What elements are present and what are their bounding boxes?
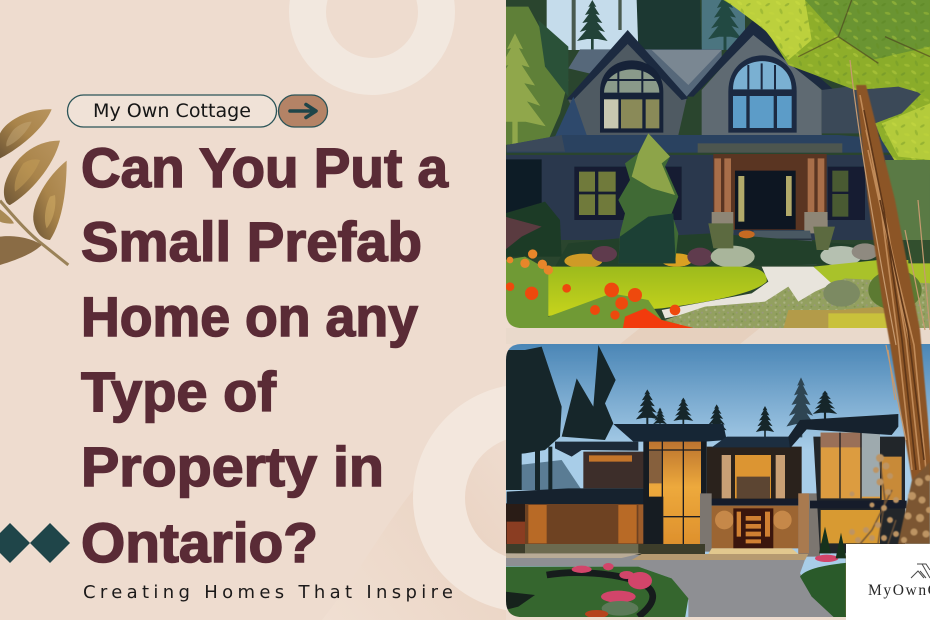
title [81,136,449,574]
title: Type of [81,360,276,423]
icon: golden leaf branch [0,109,68,265]
left lower window [574,167,682,220]
right gable [687,21,832,135]
central tall window [643,437,707,548]
tagline: Creating Homes That Inspire [83,582,453,603]
entrance [708,506,802,548]
foliage top right [723,0,930,263]
lower roof [507,135,930,153]
lawn [548,260,930,316]
decorative ring top [308,0,436,76]
shrubs [505,202,882,268]
roof [568,49,722,97]
logo box [846,544,930,620]
path [662,267,833,318]
lower wall [505,155,930,240]
modern house body [505,414,907,557]
garden beds [505,527,848,618]
driveway [505,553,835,618]
central spruce [618,133,678,263]
title: Home on any [81,285,418,348]
steps [753,231,817,265]
right wing [813,436,905,554]
pill: My Own Cottage [68,95,276,127]
title: Can You Put a [81,136,449,199]
dried flowers [846,454,930,617]
mid section [707,447,802,500]
left gable [567,30,688,135]
left arch window [600,60,663,133]
decorative swoosh and ring bottom [322,328,930,620]
pill: My Own Cottage: My Own Cottage [93,101,251,122]
title: Property in [81,435,384,498]
icon: teal diamonds [0,523,70,563]
forest trees [505,345,837,490]
icon: arrow pill [278,95,328,127]
photo: craftsman house with garden [484,0,930,335]
title: Small Prefab [81,210,422,273]
hedge [505,544,705,555]
photo: modern house at dusk [505,340,930,620]
right arch window [728,55,797,133]
decorative reeds [850,60,930,480]
porch roof [698,143,842,153]
title: Ontario? [81,511,318,574]
porch [712,154,828,233]
icon: logo mark [911,564,930,578]
right lower window [828,167,865,220]
garden flowers [505,249,930,335]
